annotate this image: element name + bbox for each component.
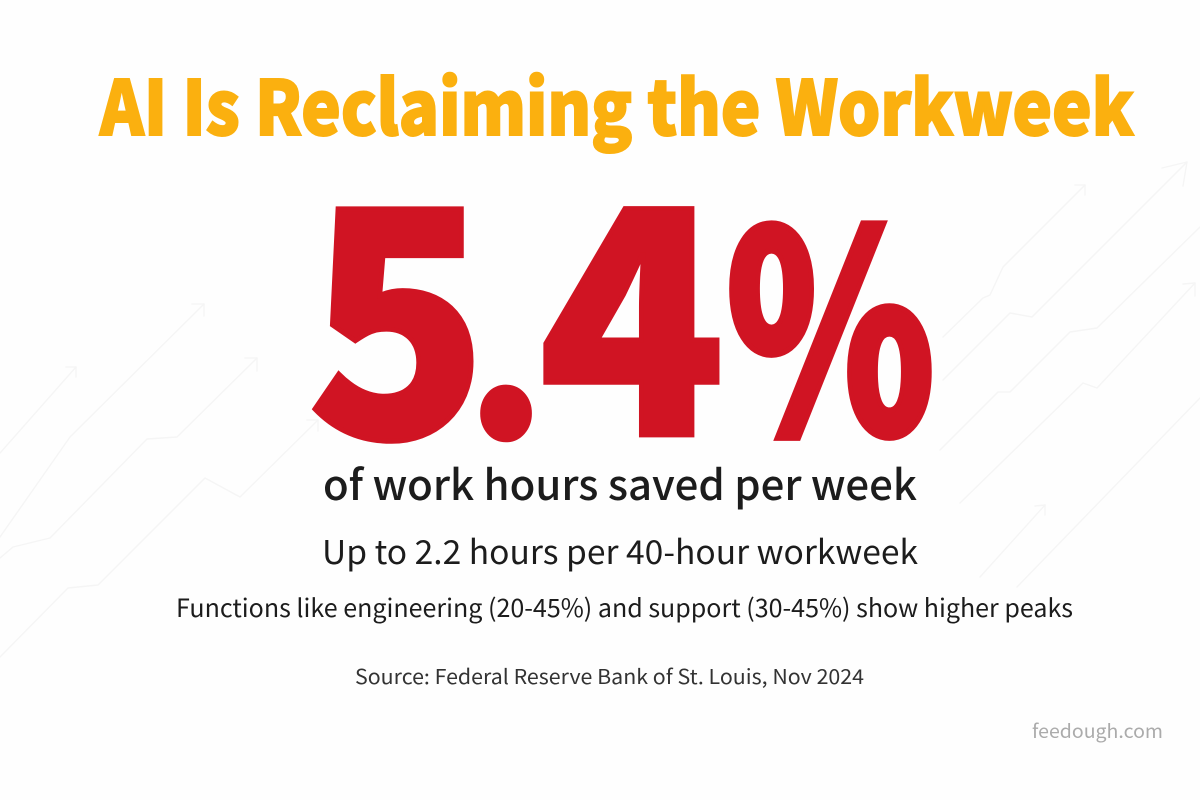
background: faint rising trend arrows: [0, 162, 1200, 657]
headline caption: of work hours saved per week: [323, 452, 917, 513]
big statistic: 5.4%: 4: [539, 73, 725, 525]
big statistic: 5.4%: 5: [307, 72, 488, 528]
source: Source: Federal Reserve Bank of St. Louis, Nov 2024: [355, 660, 864, 690]
detail line: Functions like engineering (20-45%) and support (30-45%) show higher peaks: [176, 589, 1073, 625]
sub caption: Up to 2.2 hours per 40-hour workweek: [322, 526, 918, 574]
big statistic: 5.4%: .: [466, 155, 546, 507]
watermark: feedough.com: [1032, 717, 1163, 744]
big statistic: 5.4%: [307, 72, 935, 528]
big statistic: 5.4%: %: [726, 113, 935, 515]
